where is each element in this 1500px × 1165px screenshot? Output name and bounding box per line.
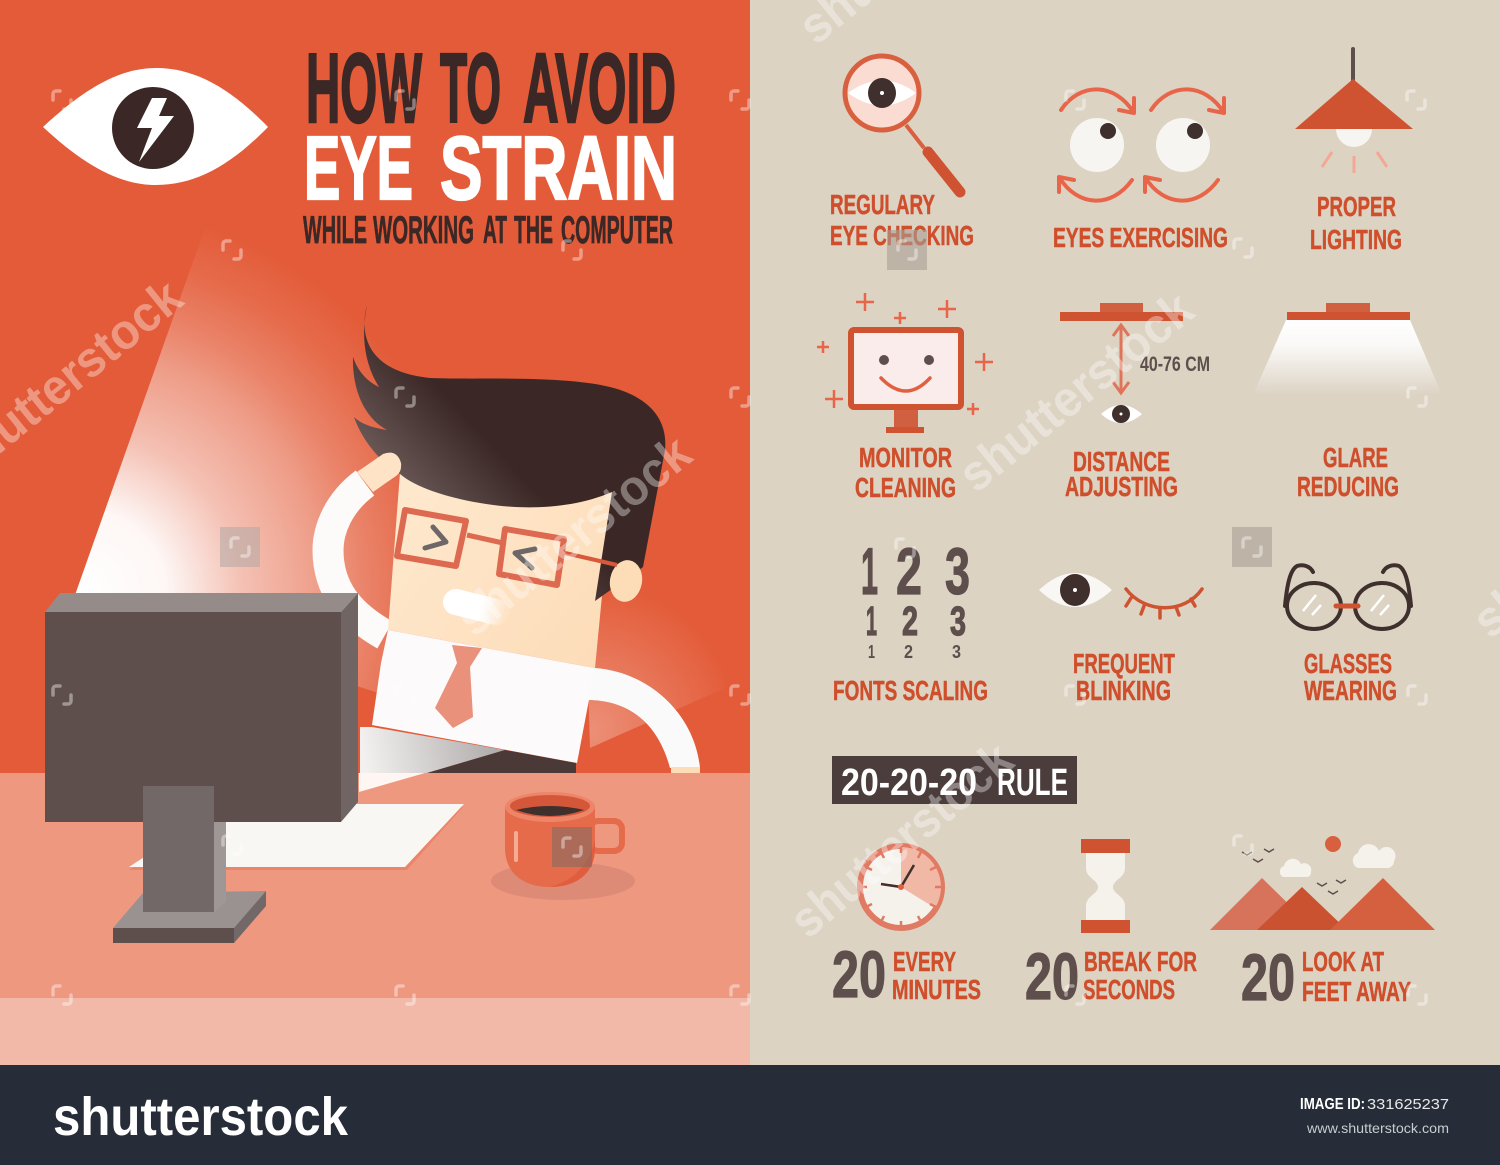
title: AVOID — [523, 33, 676, 143]
light beam from monitor — [75, 208, 490, 700]
panel: left illustration — [0, 0, 750, 1065]
footer logo: shutterstock — [53, 1087, 349, 1147]
tip: glasses wearing: WEARING — [1304, 675, 1397, 706]
tip: eyes exercising: EYES EXERCISING — [1053, 222, 1228, 253]
title: WHILE — [303, 209, 367, 252]
title: WORKING — [373, 209, 474, 252]
heading: 20-20-20 rule: 20-20-20 — [841, 762, 977, 804]
tip: proper lighting: PROPER — [1317, 191, 1396, 222]
cuff — [671, 767, 700, 773]
tip: distance adjusting — [1060, 303, 1210, 502]
tip: frequent blinking — [1039, 573, 1202, 706]
tip: fonts scaling: 1 — [868, 642, 875, 662]
rule: every 20 minutes — [832, 846, 981, 1011]
rule: every 20 minutes: EVERY — [893, 946, 956, 977]
tip: frequent blinking: FREQUENT — [1073, 648, 1175, 679]
title — [303, 33, 677, 252]
character — [328, 305, 700, 773]
rule: every 20 minutes: MINUTES — [892, 974, 981, 1005]
tip: distance adjusting: 40-76 CM — [1140, 353, 1210, 376]
footer bar: 331625237 — [1367, 1096, 1449, 1113]
title: AT — [483, 209, 507, 252]
tip: eyes exercising — [1053, 89, 1228, 253]
tip: regular eye checking — [830, 56, 974, 251]
paper on desk — [129, 804, 464, 870]
tip: proper lighting — [1295, 49, 1413, 255]
tip: fonts scaling: 2 — [904, 642, 913, 662]
rule: look 20 feet away — [1210, 836, 1435, 1014]
tip: monitor cleaning: CLEANING — [855, 472, 956, 503]
rule: break for 20 seconds: SECONDS — [1083, 974, 1175, 1005]
tip: regular eye checking: REGULARY — [830, 189, 935, 220]
rule: look 20 feet away: 20 — [1241, 940, 1295, 1014]
footer bar — [0, 1065, 1500, 1165]
rule: look 20 feet away: LOOK AT — [1302, 946, 1384, 977]
eyes — [425, 527, 535, 568]
tip: monitor cleaning: MONITOR — [859, 442, 952, 473]
light on desk — [359, 773, 425, 792]
shirt — [372, 630, 595, 763]
monitor — [45, 593, 358, 943]
tip: proper lighting: LIGHTING — [1310, 224, 1402, 255]
footer image id: IMAGE ID: — [1300, 1096, 1365, 1113]
title: HOW — [306, 33, 422, 143]
rule: every 20 minutes: 20 — [832, 937, 886, 1011]
title: EYE — [304, 119, 413, 219]
rule: break for 20 seconds: 20 — [1025, 939, 1079, 1013]
tip: distance adjusting: ADJUSTING — [1065, 471, 1178, 502]
tip: fonts scaling: FONTS SCALING — [833, 675, 988, 706]
tie — [435, 645, 482, 728]
tip: fonts scaling: 1 — [866, 598, 877, 644]
tip: distance adjusting: DISTANCE — [1073, 446, 1170, 477]
footer url: www.shutterstock.com — [1306, 1120, 1449, 1136]
tip: glare reducing — [1253, 303, 1442, 502]
raised arm — [328, 483, 385, 635]
face — [388, 473, 612, 668]
tip: glare reducing: REDUCING — [1297, 471, 1399, 502]
tip: fonts scaling: 2 — [896, 534, 922, 608]
tip: fonts scaling: 3 — [950, 598, 966, 644]
coffee cup — [491, 792, 635, 900]
monitor stand — [113, 891, 266, 928]
title: THE — [514, 209, 553, 252]
desk front strip — [0, 998, 750, 1065]
panel: right tips — [750, 0, 1500, 1065]
tip: regular eye checking: EYE CHECKING — [830, 220, 974, 251]
title: TO — [440, 33, 501, 143]
rule: break for 20 seconds: BREAK FOR — [1084, 946, 1197, 977]
tip: fonts scaling: 3 — [952, 642, 961, 662]
heading: 20-20-20 rule — [832, 756, 1077, 804]
tip: fonts scaling: 3 — [945, 534, 970, 608]
torso shadow — [360, 727, 505, 773]
dark trousers — [427, 750, 576, 773]
tip: fonts scaling: 1 — [861, 534, 878, 608]
tip: monitor cleaning — [817, 293, 993, 503]
glasses — [397, 510, 617, 585]
hair — [353, 305, 665, 601]
icon: eye with lightning — [43, 68, 268, 185]
light glow on right — [585, 575, 745, 748]
monitor back — [45, 612, 341, 822]
right arm — [587, 668, 700, 768]
watermark overlay: shutterstock — [948, 280, 1204, 503]
ear — [607, 558, 645, 604]
tip: glare reducing: GLARE — [1323, 442, 1388, 473]
tip: glasses wearing: GLASSES — [1304, 648, 1392, 679]
desk — [0, 773, 750, 998]
heading: 20-20-20 rule: RULE — [997, 762, 1068, 804]
title: STRAIN — [440, 119, 677, 219]
rule: look 20 feet away: FEET AWAY — [1302, 976, 1411, 1007]
rule: break for 20 seconds — [1025, 839, 1197, 1013]
tip: fonts scaling — [833, 534, 988, 706]
watermark overlay: shutterstock — [446, 424, 702, 647]
watermark overlay: shutterstock — [779, 731, 1024, 948]
mouth — [456, 602, 496, 612]
tip: fonts scaling: 2 — [902, 598, 918, 644]
tip: frequent blinking: BLINKING — [1076, 675, 1171, 706]
tip: glasses wearing — [1285, 565, 1411, 706]
hand — [357, 453, 401, 492]
title: COMPUTER — [561, 209, 673, 252]
